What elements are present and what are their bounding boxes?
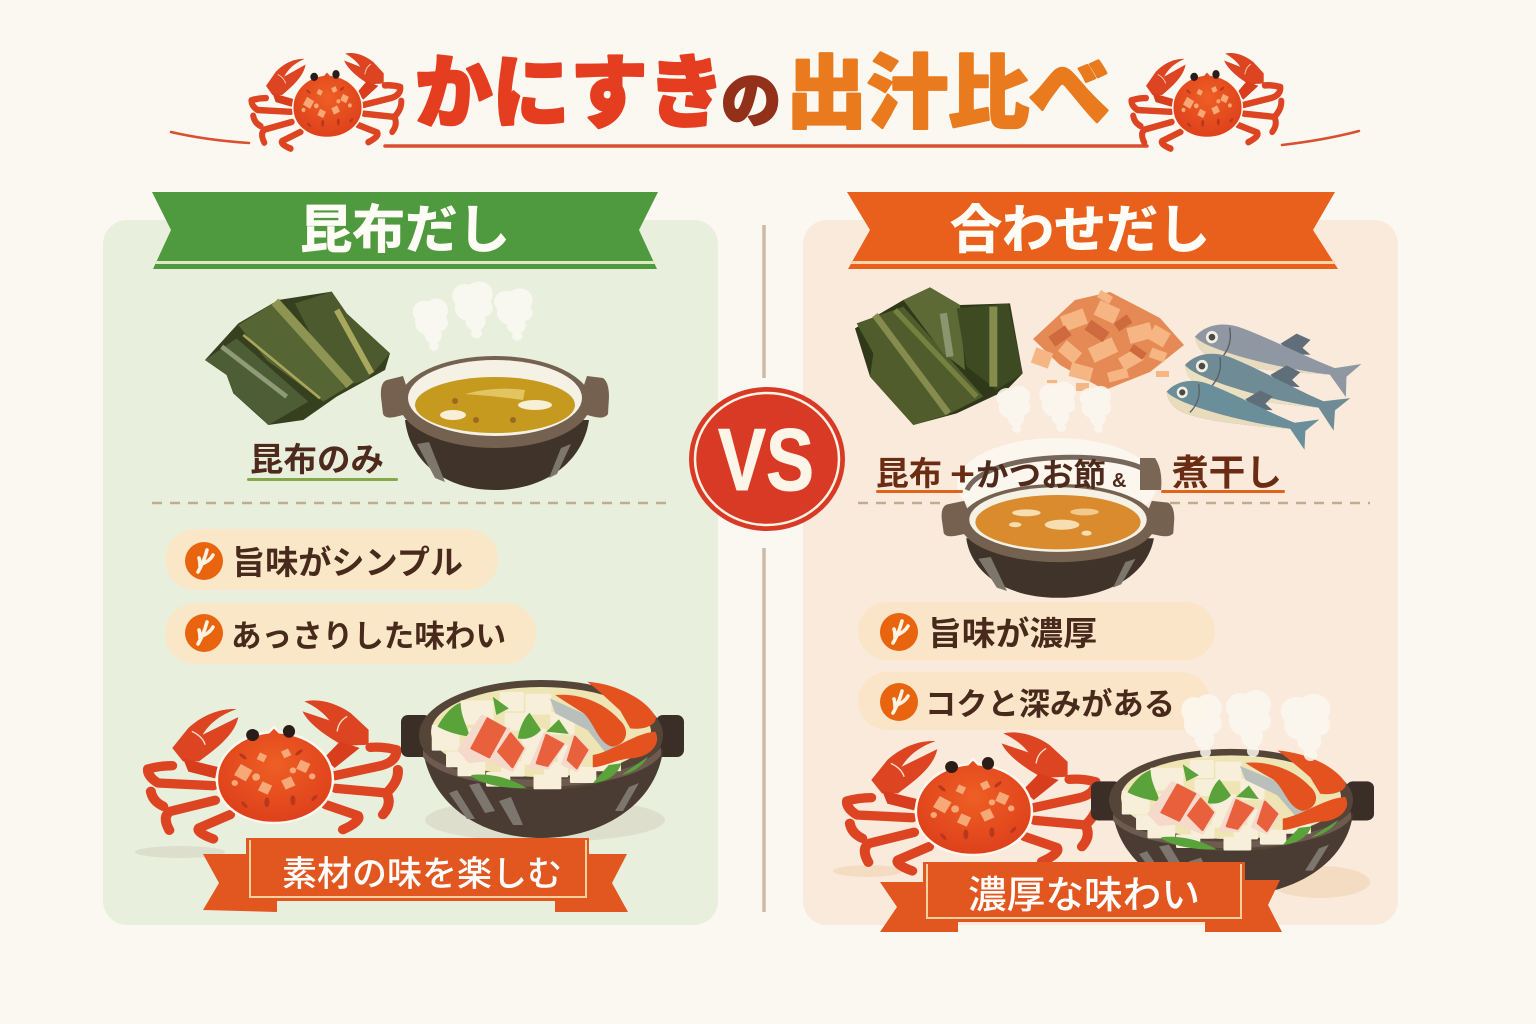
pill: rich umami: 旨味が濃厚 — [928, 615, 1097, 652]
banner: kombu dashi heading — [152, 192, 658, 269]
pill: rich umami — [858, 602, 1215, 660]
panel: mixed dashi — [803, 192, 1398, 932]
icon: steam — [996, 382, 1111, 433]
icon: dried sardines — [1161, 311, 1365, 451]
icon: crab — [148, 700, 398, 839]
label: kombu plus bonito and sardines: 昆布 — [876, 455, 942, 492]
icon: steam — [413, 281, 533, 351]
label: kombu plus bonito and sardines — [876, 452, 1285, 493]
banner: kombu dashi heading: 昆布だし — [300, 202, 510, 260]
title underline — [171, 131, 1359, 146]
banner: mixed dashi heading — [847, 192, 1338, 269]
ribbon: rich flavor: 濃厚な味わい — [968, 875, 1200, 917]
VS badge: VS — [718, 410, 814, 509]
icon: left title crab — [251, 53, 401, 149]
ribbon: enjoy the ingredients' flavor: 素材の味を楽しむ — [282, 855, 562, 894]
pill: light flavor: あっさりした味わい — [231, 619, 506, 654]
ribbon: rich flavor — [880, 862, 1282, 932]
title text: dashi comparison: 出汁比べ — [786, 49, 1110, 138]
pill: simple umami — [165, 529, 498, 590]
VS badge — [689, 387, 845, 531]
icon: right title crab — [1131, 53, 1281, 149]
icon: kombu — [205, 292, 390, 425]
pill: simple umami: 旨味がシンプル — [232, 544, 463, 581]
icon: clay pot with kombu broth — [381, 356, 609, 490]
title text: kani suki: かにすき — [415, 49, 725, 138]
label: kombu plus bonito and sardines: かつお節 — [976, 457, 1106, 493]
icon: crab hot pot — [1091, 749, 1374, 896]
label: kombu plus bonito and sardines: + — [950, 455, 975, 492]
icon: crab — [847, 732, 1097, 871]
pill: body and depth: コクと深みがある — [925, 687, 1175, 722]
panel: kombu dashi — [103, 192, 718, 925]
shadows under crab and hot pot — [135, 798, 665, 858]
panel background: kombu — [103, 220, 718, 925]
shadows under crab and hot pot — [833, 865, 1370, 898]
icon: steam over hot pot — [1181, 690, 1330, 761]
icon: clay pot with mixed broth — [942, 438, 1174, 598]
icon: kombu — [855, 287, 1023, 425]
title — [171, 49, 1359, 149]
label: kombu plus bonito and sardines: & — [1112, 470, 1126, 492]
title text: no: の — [721, 68, 781, 135]
label: kombu plus bonito and sardines: 煮干し — [1172, 452, 1282, 493]
pill: body and depth — [858, 672, 1210, 730]
panel background: mixed — [803, 220, 1398, 925]
icon: crab hot pot — [401, 680, 684, 838]
banner: mixed dashi heading: 合わせだし — [950, 202, 1210, 260]
pill: light flavor — [165, 603, 536, 664]
ribbon: enjoy the ingredients' flavor — [203, 838, 628, 912]
icon: bonito flakes — [1031, 290, 1184, 391]
label: kombu only: 昆布のみ — [250, 441, 384, 478]
